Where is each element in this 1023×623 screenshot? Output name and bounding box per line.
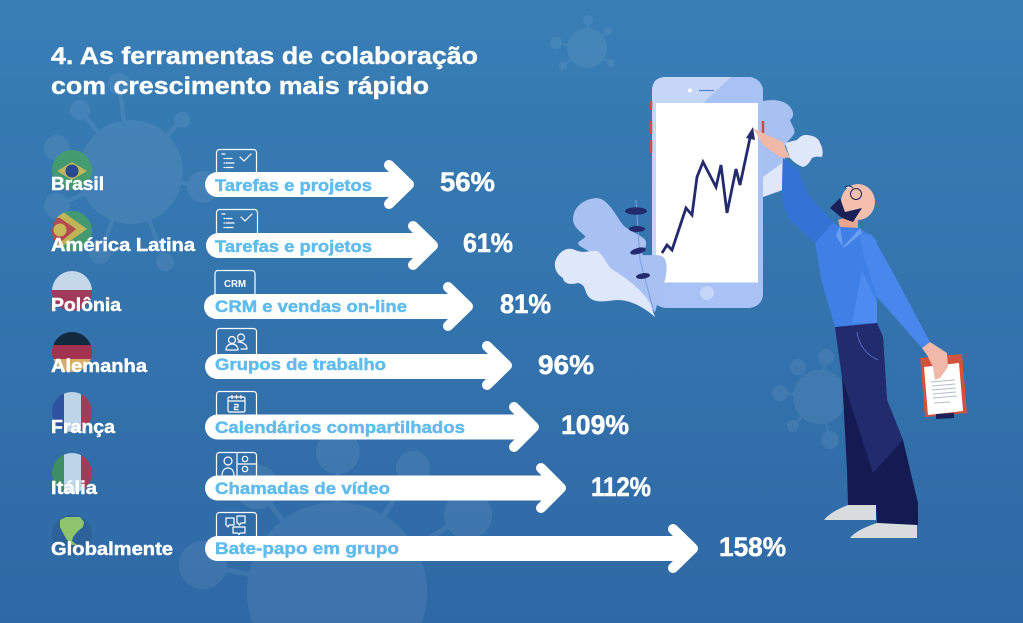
tool: CRM e vendas on-line: CRM e vendas on-line — [215, 297, 407, 316]
value: 109%: 109% — [561, 410, 629, 440]
man: front shoe — [850, 523, 917, 538]
phone home button — [700, 286, 714, 300]
icon: video call — [216, 452, 257, 482]
virus motif: right — [772, 349, 847, 449]
label: Brasil: Brasil — [51, 174, 104, 194]
virus motif: left — [44, 73, 219, 271]
man: trousers — [835, 323, 918, 525]
label: América Latina: América Latina — [51, 235, 196, 255]
label: Itália: Itália — [51, 478, 98, 498]
phone body — [652, 77, 763, 308]
arrow: 112% — [205, 468, 561, 508]
row: América Latina — [51, 210, 513, 265]
value: 96%: 96% — [538, 350, 594, 380]
row: Brasil — [51, 150, 495, 204]
illustration: man — [753, 128, 967, 538]
label: Alemanha: Alemanha — [51, 356, 148, 376]
tool: Tarefas e projetos: Tarefas e projetos — [215, 176, 372, 195]
tool: Calendários compartilhados: Calendários compartilhados — [215, 418, 465, 437]
leaf behind phone, right — [755, 100, 795, 197]
sleeve drape — [763, 163, 782, 197]
man: pocket — [857, 332, 878, 360]
man: trousers highlight — [835, 323, 903, 473]
phone highlight — [652, 77, 731, 283]
arrow: 96% — [205, 346, 507, 385]
icon: work group — [216, 328, 256, 358]
man: shirt — [815, 223, 877, 327]
leaf, back left — [573, 198, 667, 312]
label: Globalmente: Globalmente — [51, 539, 173, 559]
arrow: 158% — [205, 529, 693, 568]
flag: Brasil — [52, 150, 92, 190]
illustration: phone with growth chart — [555, 77, 795, 317]
value: 112%: 112% — [591, 472, 651, 502]
value: 56%: 56% — [440, 167, 495, 197]
phone speaker — [699, 90, 714, 92]
row: Globalmente — [51, 512, 786, 568]
row: França — [51, 392, 629, 447]
man: glasses — [845, 186, 862, 200]
growth arrowhead — [746, 127, 755, 140]
title: com crescimento mais rápido — [51, 73, 429, 100]
man: lower hand — [922, 342, 948, 380]
arrow: 109% — [205, 407, 534, 447]
icon: group chat — [216, 512, 256, 542]
flag: América Latina — [52, 211, 92, 251]
icon: CRM — [215, 270, 255, 300]
virus motif: bottom — [179, 430, 492, 623]
arrow: 56% — [205, 165, 409, 204]
leaf, front left — [555, 249, 655, 317]
tool: Chamadas de vídeo: Chamadas de vídeo — [215, 479, 390, 498]
man: shirt highlight — [852, 270, 877, 323]
phone side buttons — [651, 101, 763, 153]
phone screen — [656, 103, 758, 282]
icon: task list — [216, 210, 258, 240]
clipboard — [920, 354, 967, 419]
man: rear shoe — [824, 505, 876, 520]
man: beard — [830, 198, 862, 222]
value: 81%: 81% — [500, 289, 551, 319]
leaf stem — [636, 200, 654, 312]
man: head — [841, 184, 875, 220]
title: 4. As ferramentas de colaboração — [51, 43, 478, 70]
tool: Grupos de trabalho: Grupos de trabalho — [215, 355, 386, 374]
icon: task list — [216, 150, 256, 180]
row: Itália — [51, 452, 651, 508]
globe — [52, 515, 92, 555]
growth line — [662, 138, 750, 253]
man: lower arm — [860, 233, 930, 348]
row: Polônia — [51, 270, 551, 326]
tool: Bate-papo em grupo: Bate-papo em grupo — [215, 539, 399, 558]
value: 158%: 158% — [719, 532, 786, 562]
man: shirt collar — [836, 226, 862, 248]
flag: Alemanha — [52, 332, 92, 372]
flag: Polônia — [52, 271, 92, 311]
arrow: 61% — [206, 226, 434, 265]
label: França: França — [51, 417, 116, 437]
flag: Itália — [52, 453, 92, 493]
tool: Tarefas e projetos: Tarefas e projetos — [215, 237, 372, 256]
title — [51, 43, 478, 100]
man: raised hand — [753, 128, 790, 158]
virus motif: top — [550, 15, 615, 70]
icon: calendar — [216, 392, 256, 422]
man: neck — [838, 213, 858, 236]
flag: França — [52, 392, 92, 432]
phone camera — [688, 88, 692, 92]
man: shirt cuff — [785, 135, 823, 167]
value: 61%: 61% — [463, 228, 513, 258]
man: raised sleeve — [782, 158, 840, 243]
arrow: 81% — [204, 287, 469, 326]
icon: CRM: CRM — [224, 279, 246, 290]
leaf spots — [625, 207, 650, 280]
row: Alemanha — [51, 328, 594, 385]
label: Polônia: Polônia — [51, 295, 122, 315]
